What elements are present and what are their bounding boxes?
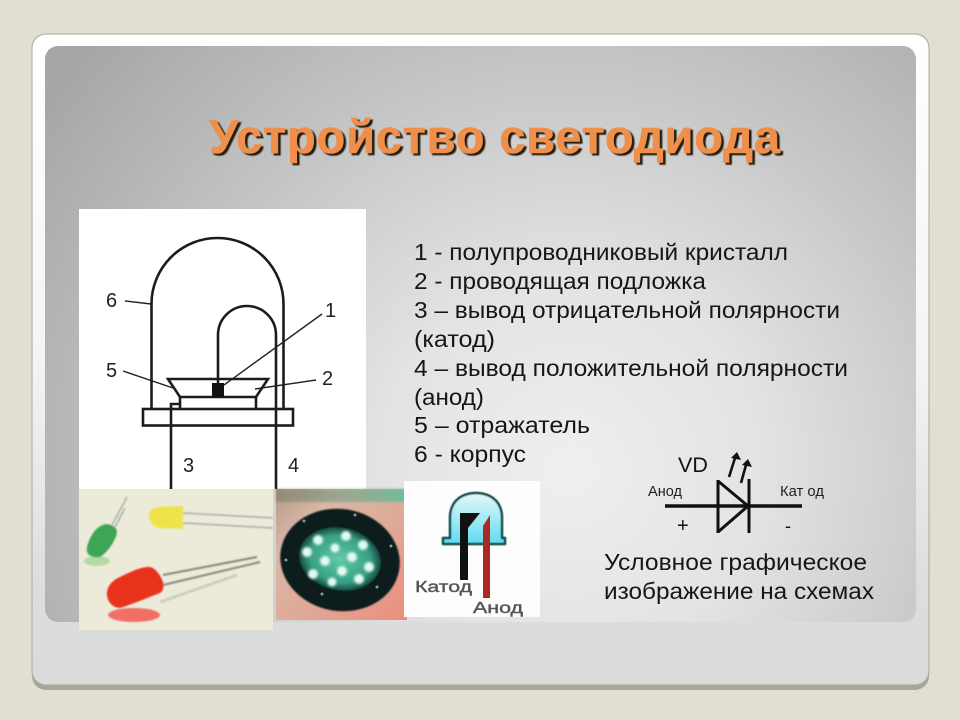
schematic caption [604, 549, 874, 604]
legend text: 3 – вывод отрицательной полярности [414, 297, 840, 323]
legend text: (катод) [414, 326, 495, 352]
green LED [84, 497, 127, 566]
legend text: 6 - корпус [414, 441, 526, 467]
schematic caption: изображение на схемах [604, 578, 874, 604]
legend text: 5 – отражатель [414, 412, 590, 438]
legend text: 4 – вывод положительной полярности [414, 355, 848, 381]
number labels: 3 [183, 455, 194, 477]
diode schematic symbol: - [785, 516, 791, 536]
legend text: (анод) [414, 384, 484, 410]
number labels: 6 [106, 290, 117, 312]
legend text [414, 239, 848, 467]
photo: LED lamp [272, 489, 408, 621]
number labels [106, 290, 336, 477]
icon: LED with cathode and anode: Катод [415, 579, 473, 596]
number labels: 2 [322, 368, 333, 390]
number labels: 1 [325, 300, 336, 322]
title: Устройство светодиода [209, 110, 781, 163]
LED structure diagram [79, 209, 366, 489]
photo: coloured LEDs [79, 489, 273, 630]
leader lines [123, 301, 322, 389]
red LED [107, 557, 260, 622]
dome casing and base [143, 238, 293, 489]
number labels: 4 [288, 455, 299, 477]
yellow LED [149, 506, 273, 529]
icon: LED with cathode and anode: Анод [473, 600, 524, 617]
schematic caption: Условное графическое [604, 549, 867, 575]
diode schematic symbol: Кат од [780, 483, 824, 500]
title: Устройство светодиода [212, 112, 783, 165]
diode schematic symbol: Анод [648, 483, 682, 500]
number labels: 5 [106, 360, 117, 382]
icon: LED with cathode and anode [404, 481, 540, 617]
grey gradient panel [45, 46, 916, 622]
light arrows [729, 452, 752, 483]
legend text: 2 - проводящая подложка [414, 268, 706, 294]
legend text: 1 - полупроводниковый кристалл [414, 239, 788, 265]
diode schematic symbol: VD [678, 453, 708, 477]
diode schematic symbol: + [677, 515, 689, 537]
semiconductor chip [212, 383, 224, 397]
diode schematic symbol [648, 452, 824, 537]
